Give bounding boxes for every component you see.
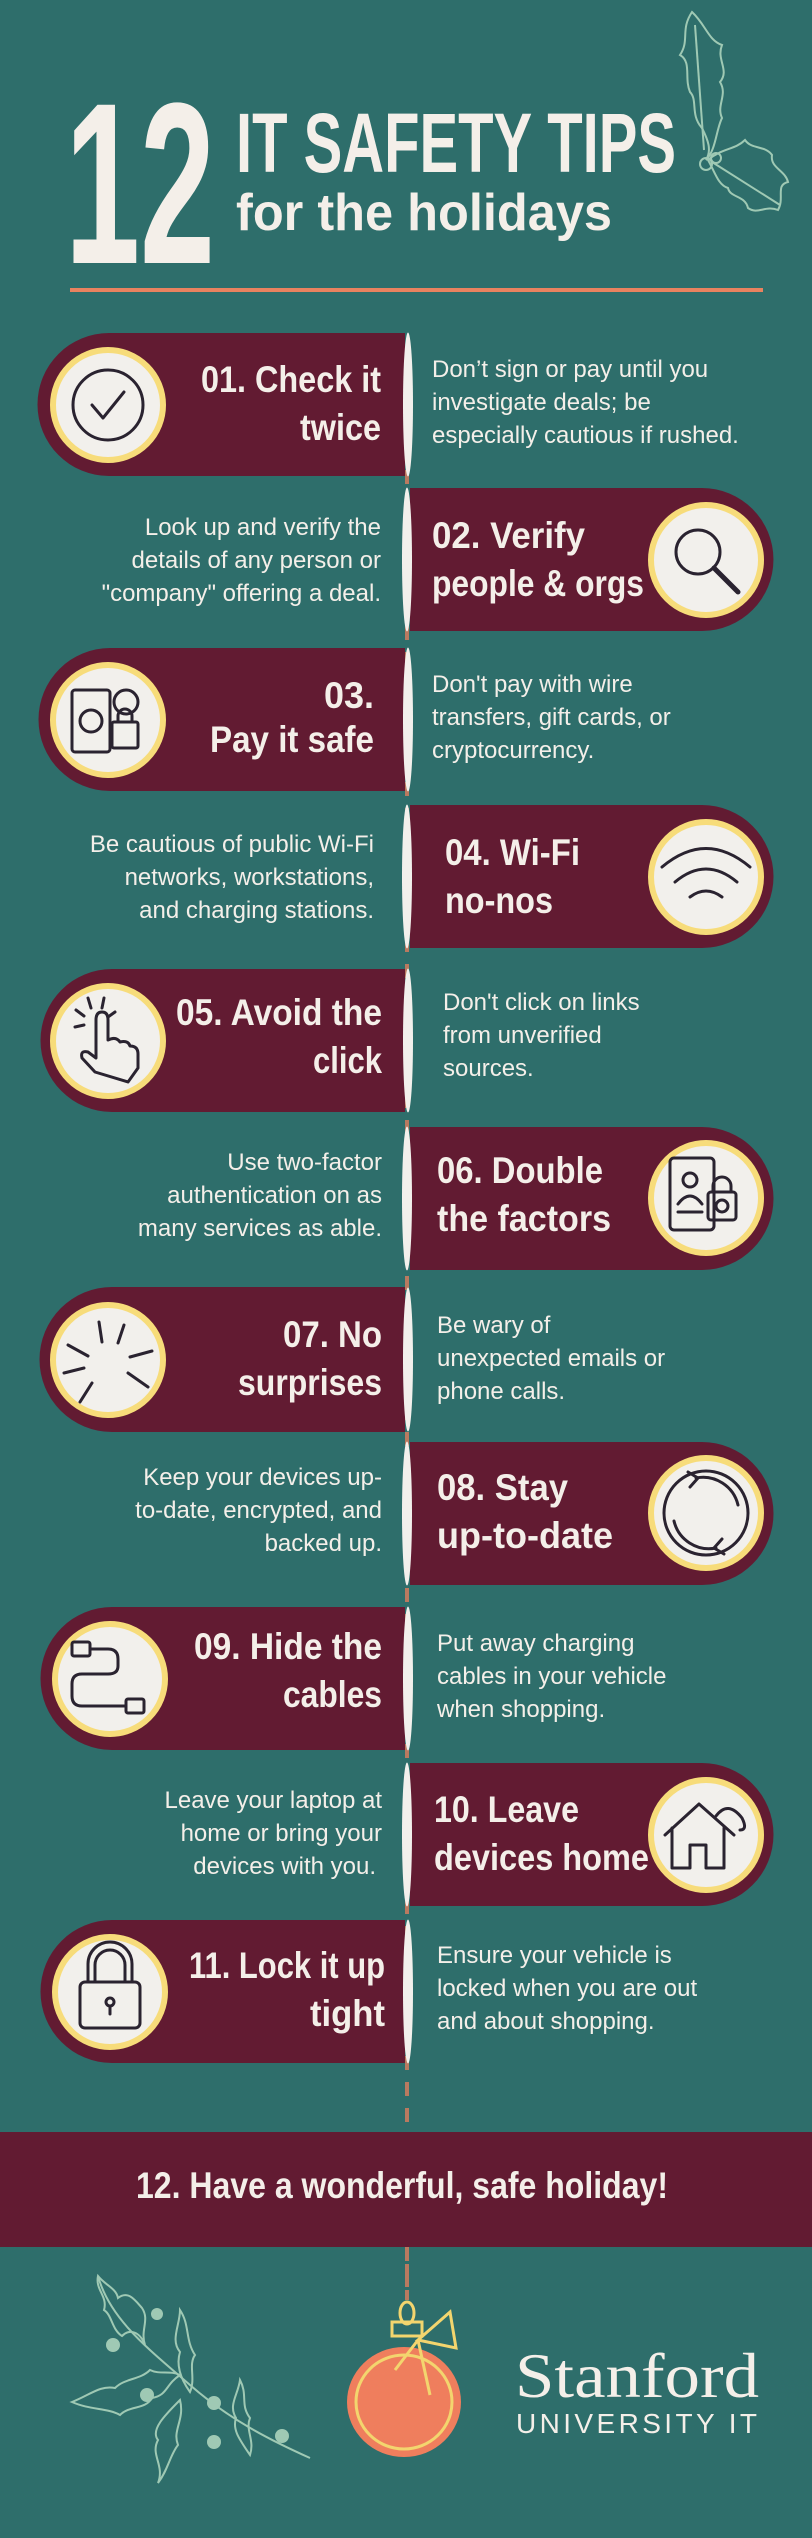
item 11: locked when you are out [437,1975,698,2002]
icon: holly bottom left [72,2276,310,2483]
item 05: Don't click on links [443,989,640,1016]
item 04: Be cautious of public Wi-Fi [90,831,374,858]
title [65,55,676,312]
banner: 12: 12. Have a wonderful, safe holiday! [136,2165,668,2206]
item 07: 07. No [283,1314,382,1355]
item 08: up-to-date [437,1515,613,1556]
item 08: backed up. [265,1530,382,1557]
item 09: when shopping. [436,1696,605,1723]
item 11: tight [310,1993,385,2034]
item 04: networks, workstations, [125,864,374,891]
item 02: "company" offering a deal. [102,580,381,607]
item 05 [40,968,640,1112]
item 08: 08. Stay [437,1467,568,1508]
item 03: cryptocurrency. [432,737,594,764]
item 05: from unverified [443,1022,602,1049]
item 01: twice [300,407,381,448]
icon: ornament [347,2247,461,2457]
item 11: 11. Lock it up [189,1945,385,1986]
item 09: cables [283,1674,382,1715]
item 11: and about shopping. [437,2008,655,2035]
item 11 [40,1920,698,2064]
title: 12 [65,55,215,312]
item 10: devices with you. [193,1853,376,1880]
item 08 [135,1442,774,1586]
item 07: unexpected emails or [437,1345,665,1372]
item 03: transfers, gift cards, or [432,704,671,731]
item 07: phone calls. [437,1378,565,1405]
item 05: sources. [443,1055,534,1082]
item 08: to-date, encrypted, and [135,1497,382,1524]
item 01 [37,332,739,476]
title: for the holidays [236,184,612,242]
logo: Stanford University IT: Stanford [515,2340,759,2411]
item 10 [164,1762,774,1906]
item 09 [40,1606,666,1750]
item 01: Don’t sign or pay until you [432,356,708,383]
item 09: 09. Hide the [194,1626,382,1667]
item 07 [40,1287,665,1432]
item 03: 03. [324,675,374,716]
item 04: no-nos [445,880,553,921]
icon: holly top right [680,12,788,211]
item 01: investigate deals; be [432,389,651,416]
item 02 [102,488,773,632]
item 04: 04. Wi-Fi [445,832,580,873]
item 04: and charging stations. [139,897,374,924]
item 07: Be wary of [437,1312,551,1339]
item 03: Pay it safe [210,719,374,760]
item 08: Keep your devices up- [143,1464,382,1491]
item 07: surprises [238,1362,382,1403]
item 10: home or bring your [181,1820,382,1847]
item 03 [39,648,671,792]
banner: 12 [0,2132,812,2247]
item 02: people & orgs [432,563,644,604]
item 05: 05. Avoid the [176,992,382,1033]
item 06: 06. Double [437,1150,603,1191]
item 10: devices home [434,1837,649,1878]
item 04 [90,804,774,948]
item 06: many services as able. [138,1215,382,1242]
item 01: 01. Check it [201,359,381,400]
item 02: 02. Verify [432,515,585,556]
item 11: Ensure your vehicle is [437,1942,672,1969]
logo: Stanford University IT: UNIVERSITY IT [516,2408,757,2439]
item 06 [138,1126,774,1270]
item 10: Leave your laptop at [164,1787,382,1814]
item 01: especially cautious if rushed. [432,422,739,449]
logo: Stanford University IT [515,2340,759,2439]
item 06: the factors [437,1198,611,1239]
item 02: Look up and verify the [145,514,381,541]
item 05: click [313,1040,382,1081]
item 03: Don't pay with wire [432,671,633,698]
item 10: 10. Leave [434,1789,579,1830]
item 02: details of any person or [132,547,381,574]
item 09: Put away charging [437,1630,634,1657]
item 09: cables in your vehicle [437,1663,666,1690]
item 06: authentication on as [167,1182,382,1209]
item 06: Use two-factor [227,1149,382,1176]
